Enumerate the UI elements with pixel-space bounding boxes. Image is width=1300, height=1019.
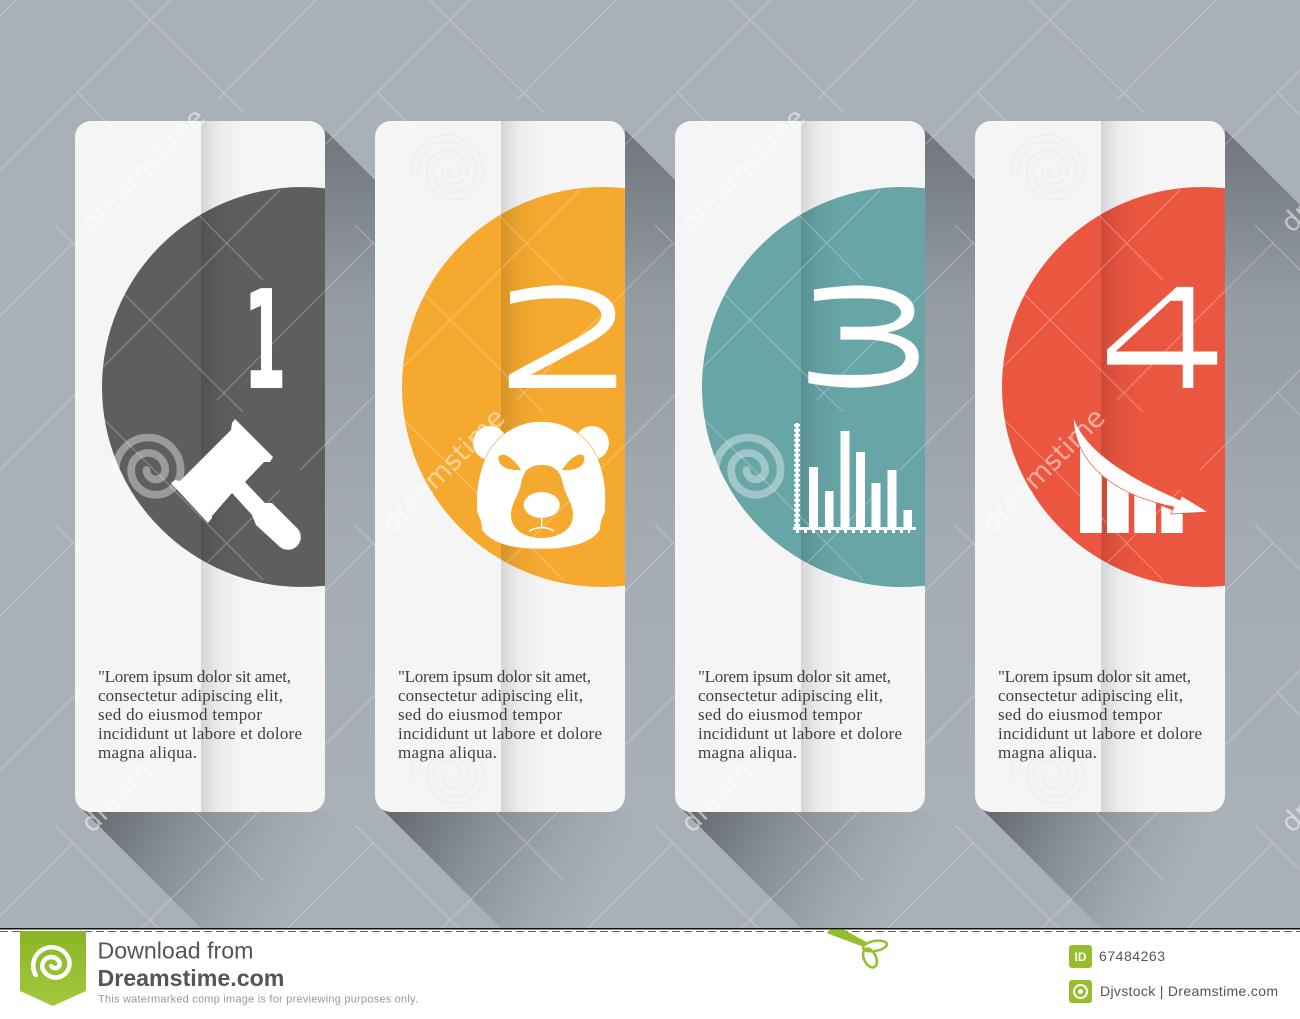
watermark overlay: dreamstime <box>975 402 1112 539</box>
body text 4: "Lorem ipsum dolor sit amet, <box>998 667 1191 686</box>
icon: falling chart <box>1073 417 1208 533</box>
watermark overlay: dreamstime <box>675 702 812 839</box>
watermark overlay: dreamstime <box>75 702 212 839</box>
circle 4 <box>1002 187 1225 587</box>
number 4: 4 <box>1090 261 1236 419</box>
panel 3: bar chart <box>675 121 925 812</box>
body text 1: sed do eiusmod tempor <box>98 705 262 724</box>
body text 1: incididunt ut labore et dolore <box>98 724 302 743</box>
body text 3: incididunt ut labore et dolore <box>698 724 902 743</box>
body text 1: magna aliqua. <box>98 743 197 762</box>
body text 2: sed do eiusmod tempor <box>398 705 562 724</box>
icon: bear <box>473 422 609 549</box>
body text 3: sed do eiusmod tempor <box>698 705 862 724</box>
author credit: Djvstock | Dreamstime.com <box>1100 983 1278 999</box>
icon: ID badge: ID <box>1074 950 1087 964</box>
image id: 67484263 <box>1099 948 1165 964</box>
card spirals 4 <box>1015 139 1080 800</box>
body text 4: magna aliqua. <box>998 743 1097 762</box>
icon: ID badge <box>1069 945 1092 968</box>
body text 2: magna aliqua. <box>398 743 497 762</box>
body text 2: "Lorem ipsum dolor sit amet, <box>398 667 591 686</box>
download heading: Download from <box>98 938 253 964</box>
panel 1: gavel <box>75 121 325 812</box>
icon: copyright badge <box>1069 980 1092 1003</box>
icon: download badge <box>20 931 86 1006</box>
panel 4: falling chart <box>975 121 1225 812</box>
body text 3: "Lorem ipsum dolor sit amet, <box>698 667 891 686</box>
icon: scissors <box>827 930 888 970</box>
panel 2: bear <box>375 121 625 812</box>
panel shadows <box>79 130 1300 928</box>
number 3: 3 <box>783 261 945 416</box>
circle 3 <box>702 187 925 587</box>
body text 3: consectetur adipiscing elit, <box>698 686 883 705</box>
body text 4: consectetur adipiscing elit, <box>998 686 1183 705</box>
body text 2: consectetur adipiscing elit, <box>398 686 583 705</box>
watermark overlay: dreamstime <box>75 102 212 239</box>
body text 1: "Lorem ipsum dolor sit amet, <box>98 667 291 686</box>
circle 1 <box>102 187 325 587</box>
body text 4: sed do eiusmod tempor <box>998 705 1162 724</box>
icon: bar chart <box>793 423 916 531</box>
footer bar <box>0 928 1300 1019</box>
watermark overlay: dreamstime <box>675 102 812 239</box>
circle 2 <box>402 187 625 587</box>
body text 1: consectetur adipiscing elit, <box>98 686 283 705</box>
number 2: 2 <box>484 261 648 419</box>
body text 4: incididunt ut labore et dolore <box>998 724 1202 743</box>
icon: gavel <box>171 419 301 550</box>
watermark overlay: dreamstime <box>375 402 512 539</box>
brand name: Dreamstime.com <box>98 965 284 991</box>
body text 3: magna aliqua. <box>698 743 797 762</box>
preview notice: This watermarked comp image is for previewing purposes only. <box>98 994 418 1006</box>
number 1: 1 <box>243 262 287 421</box>
body text 2: incididunt ut labore et dolore <box>398 724 602 743</box>
card spirals 2 <box>415 139 480 800</box>
